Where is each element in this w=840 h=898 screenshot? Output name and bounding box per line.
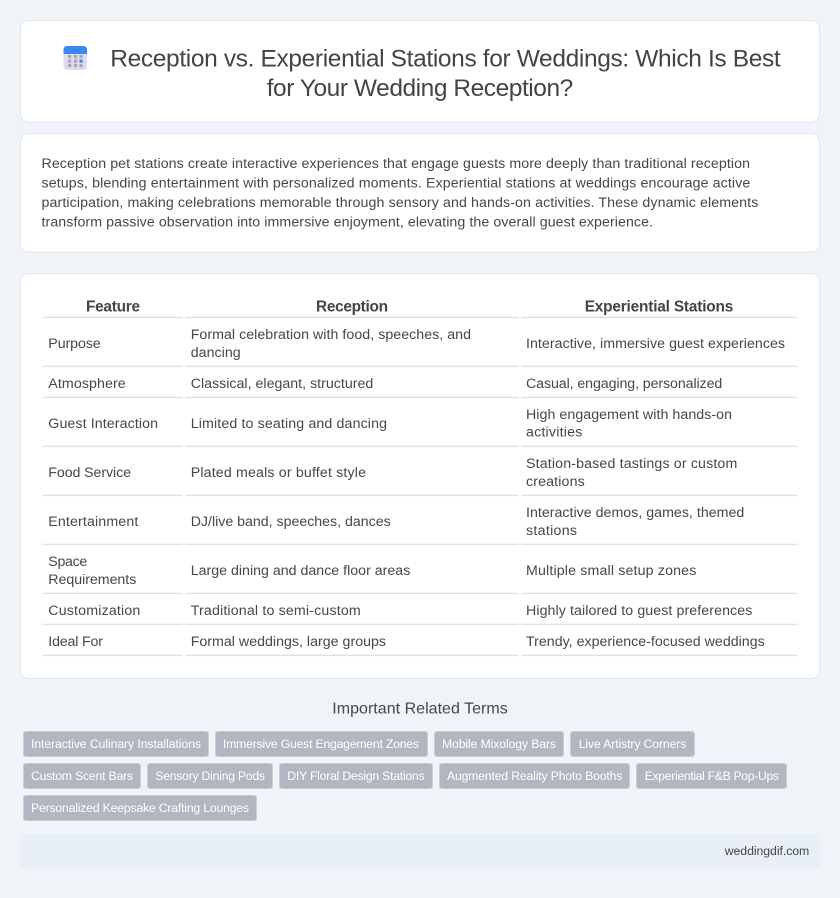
tag bbox=[440, 764, 630, 788]
row: space requirements: Space bbox=[48, 554, 87, 570]
row: atmosphere: Classical, elegant, structured bbox=[191, 376, 373, 392]
row: ideal for: Formal weddings, large groups bbox=[191, 634, 386, 650]
panel: introduction bbox=[20, 134, 820, 252]
row: ideal for: Ideal For bbox=[48, 634, 103, 650]
row: entertainment: stations bbox=[526, 523, 577, 539]
tag: Interactive Culinary Installations bbox=[31, 737, 201, 751]
row: space requirements bbox=[43, 554, 797, 594]
row: food service bbox=[43, 456, 797, 496]
row: food service: creations bbox=[526, 474, 585, 490]
row: customization: Highly tailored to guest preferences bbox=[526, 603, 752, 619]
panel: comparison table bbox=[20, 274, 820, 678]
row: space requirements: Large dining and dance floor areas bbox=[191, 563, 410, 579]
row: food service: Station-based tastings or custom bbox=[526, 456, 737, 472]
tag: Live Artistry Corners bbox=[579, 737, 686, 751]
footer: weddingdif.com bbox=[724, 844, 809, 858]
tag: Mobile Mixology Bars bbox=[442, 737, 556, 751]
tag bbox=[24, 732, 208, 756]
tag bbox=[24, 796, 256, 820]
row: atmosphere: Atmosphere bbox=[48, 376, 126, 392]
row: purpose: dancing bbox=[191, 345, 241, 361]
row: guest interaction: High engagement with hands-on bbox=[526, 407, 732, 423]
tag bbox=[570, 732, 694, 756]
title: Reception vs. Experiential Stations for Weddings: Which Is Best bbox=[110, 46, 781, 73]
table header: Experiential Stations bbox=[585, 299, 733, 316]
row: entertainment: DJ/live band, speeches, dances bbox=[191, 514, 391, 530]
icon: calendar bbox=[64, 46, 87, 70]
row: entertainment bbox=[43, 505, 797, 545]
tag: DIY Floral Design Stations bbox=[287, 769, 425, 783]
row: customization bbox=[43, 603, 797, 625]
row: customization: Customization bbox=[48, 603, 140, 619]
tag: Personalized Keepsake Crafting Lounges bbox=[31, 801, 249, 815]
tag list bbox=[24, 732, 786, 820]
tag: Immersive Guest Engagement Zones bbox=[223, 737, 419, 751]
table header: Feature bbox=[86, 299, 140, 316]
row: atmosphere: Casual, engaging, personalized bbox=[526, 376, 722, 392]
intro paragraph: participation, making celebrations memorable through sensory and hands-on activities. These dynamic elements bbox=[42, 195, 758, 211]
heading: important related terms: Important Related Terms bbox=[332, 701, 508, 718]
tag bbox=[636, 764, 786, 788]
tag: Experiential F&B Pop-Ups bbox=[645, 769, 779, 783]
row: space requirements: Requirements bbox=[48, 572, 136, 588]
row: purpose: Interactive, immersive guest experiences bbox=[526, 336, 785, 352]
tag bbox=[434, 732, 564, 756]
table header: Reception bbox=[316, 299, 388, 316]
tag bbox=[280, 764, 432, 788]
intro paragraph bbox=[42, 156, 758, 231]
row: guest interaction: Guest Interaction bbox=[48, 416, 158, 432]
intro paragraph: transform passive observation into immersive enjoyment, elevating the overall guest experience. bbox=[42, 215, 653, 231]
row: entertainment: Entertainment bbox=[48, 514, 138, 530]
row: ideal for: Trendy, experience-focused weddings bbox=[526, 634, 765, 650]
row: purpose: Formal celebration with food, speeches, and bbox=[191, 327, 471, 343]
row: food service: Plated meals or buffet style bbox=[191, 465, 366, 481]
tag: Augmented Reality Photo Booths bbox=[447, 769, 622, 783]
row: guest interaction: Limited to seating and dancing bbox=[191, 416, 387, 432]
row: customization: Traditional to semi-custom bbox=[191, 603, 361, 619]
tag bbox=[148, 764, 272, 788]
row: ideal for bbox=[43, 634, 797, 656]
tag: Sensory Dining Pods bbox=[155, 769, 265, 783]
row: space requirements: Multiple small setup zones bbox=[526, 563, 696, 579]
row: food service: Food Service bbox=[48, 465, 131, 481]
row: purpose bbox=[43, 327, 797, 367]
panel: header bbox=[20, 20, 820, 122]
footer bbox=[20, 834, 820, 868]
row: guest interaction bbox=[43, 407, 797, 447]
tag bbox=[216, 732, 428, 756]
title bbox=[110, 46, 781, 102]
title: for Your Wedding Reception? bbox=[267, 75, 573, 102]
row: atmosphere bbox=[43, 376, 797, 398]
tag bbox=[24, 764, 140, 788]
table header bbox=[43, 299, 797, 318]
row: entertainment: Interactive demos, games, themed bbox=[526, 505, 744, 521]
row: purpose: Purpose bbox=[48, 336, 101, 352]
intro paragraph: Reception pet stations create interactive experiences that engage guests more deeply than traditional reception bbox=[42, 156, 750, 172]
row: guest interaction: activities bbox=[526, 425, 582, 441]
intro paragraph: setups, blending entertainment with personalized moments. Experiential stations at weddings encourage active bbox=[42, 175, 750, 191]
tag: Custom Scent Bars bbox=[31, 769, 133, 783]
